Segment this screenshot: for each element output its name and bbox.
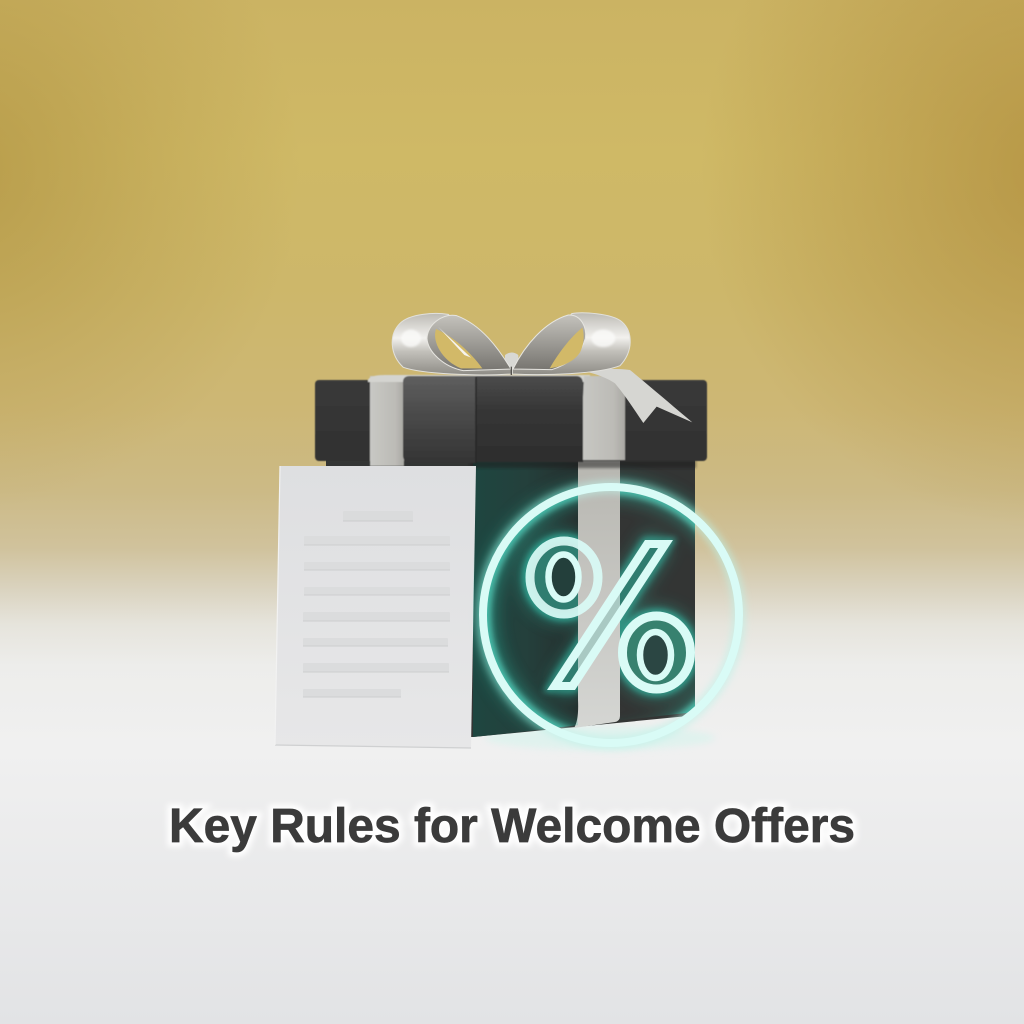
bow and ribbon tail (392, 313, 692, 423)
right bow loop (512, 313, 630, 375)
document text lines (303, 536, 450, 697)
box body (326, 458, 696, 737)
upper percent ring (530, 541, 598, 614)
box lid (315, 375, 707, 466)
left bow loop (392, 313, 512, 375)
teal glow on box (485, 489, 737, 741)
document heading line (343, 511, 413, 521)
neon circle ring (483, 487, 739, 743)
document sheet (275, 466, 476, 748)
ribbon tail (582, 369, 692, 423)
title: Key Rules for Welcome Offers (169, 800, 855, 853)
neon percent badge (483, 487, 739, 743)
percent slash (547, 540, 673, 690)
title: Key Rules for Welcome Offers (169, 800, 855, 853)
gift box (315, 313, 707, 737)
mint floor glow under badge (485, 726, 715, 750)
pale mint outer glow (483, 487, 739, 743)
lower percent ring (622, 616, 690, 689)
